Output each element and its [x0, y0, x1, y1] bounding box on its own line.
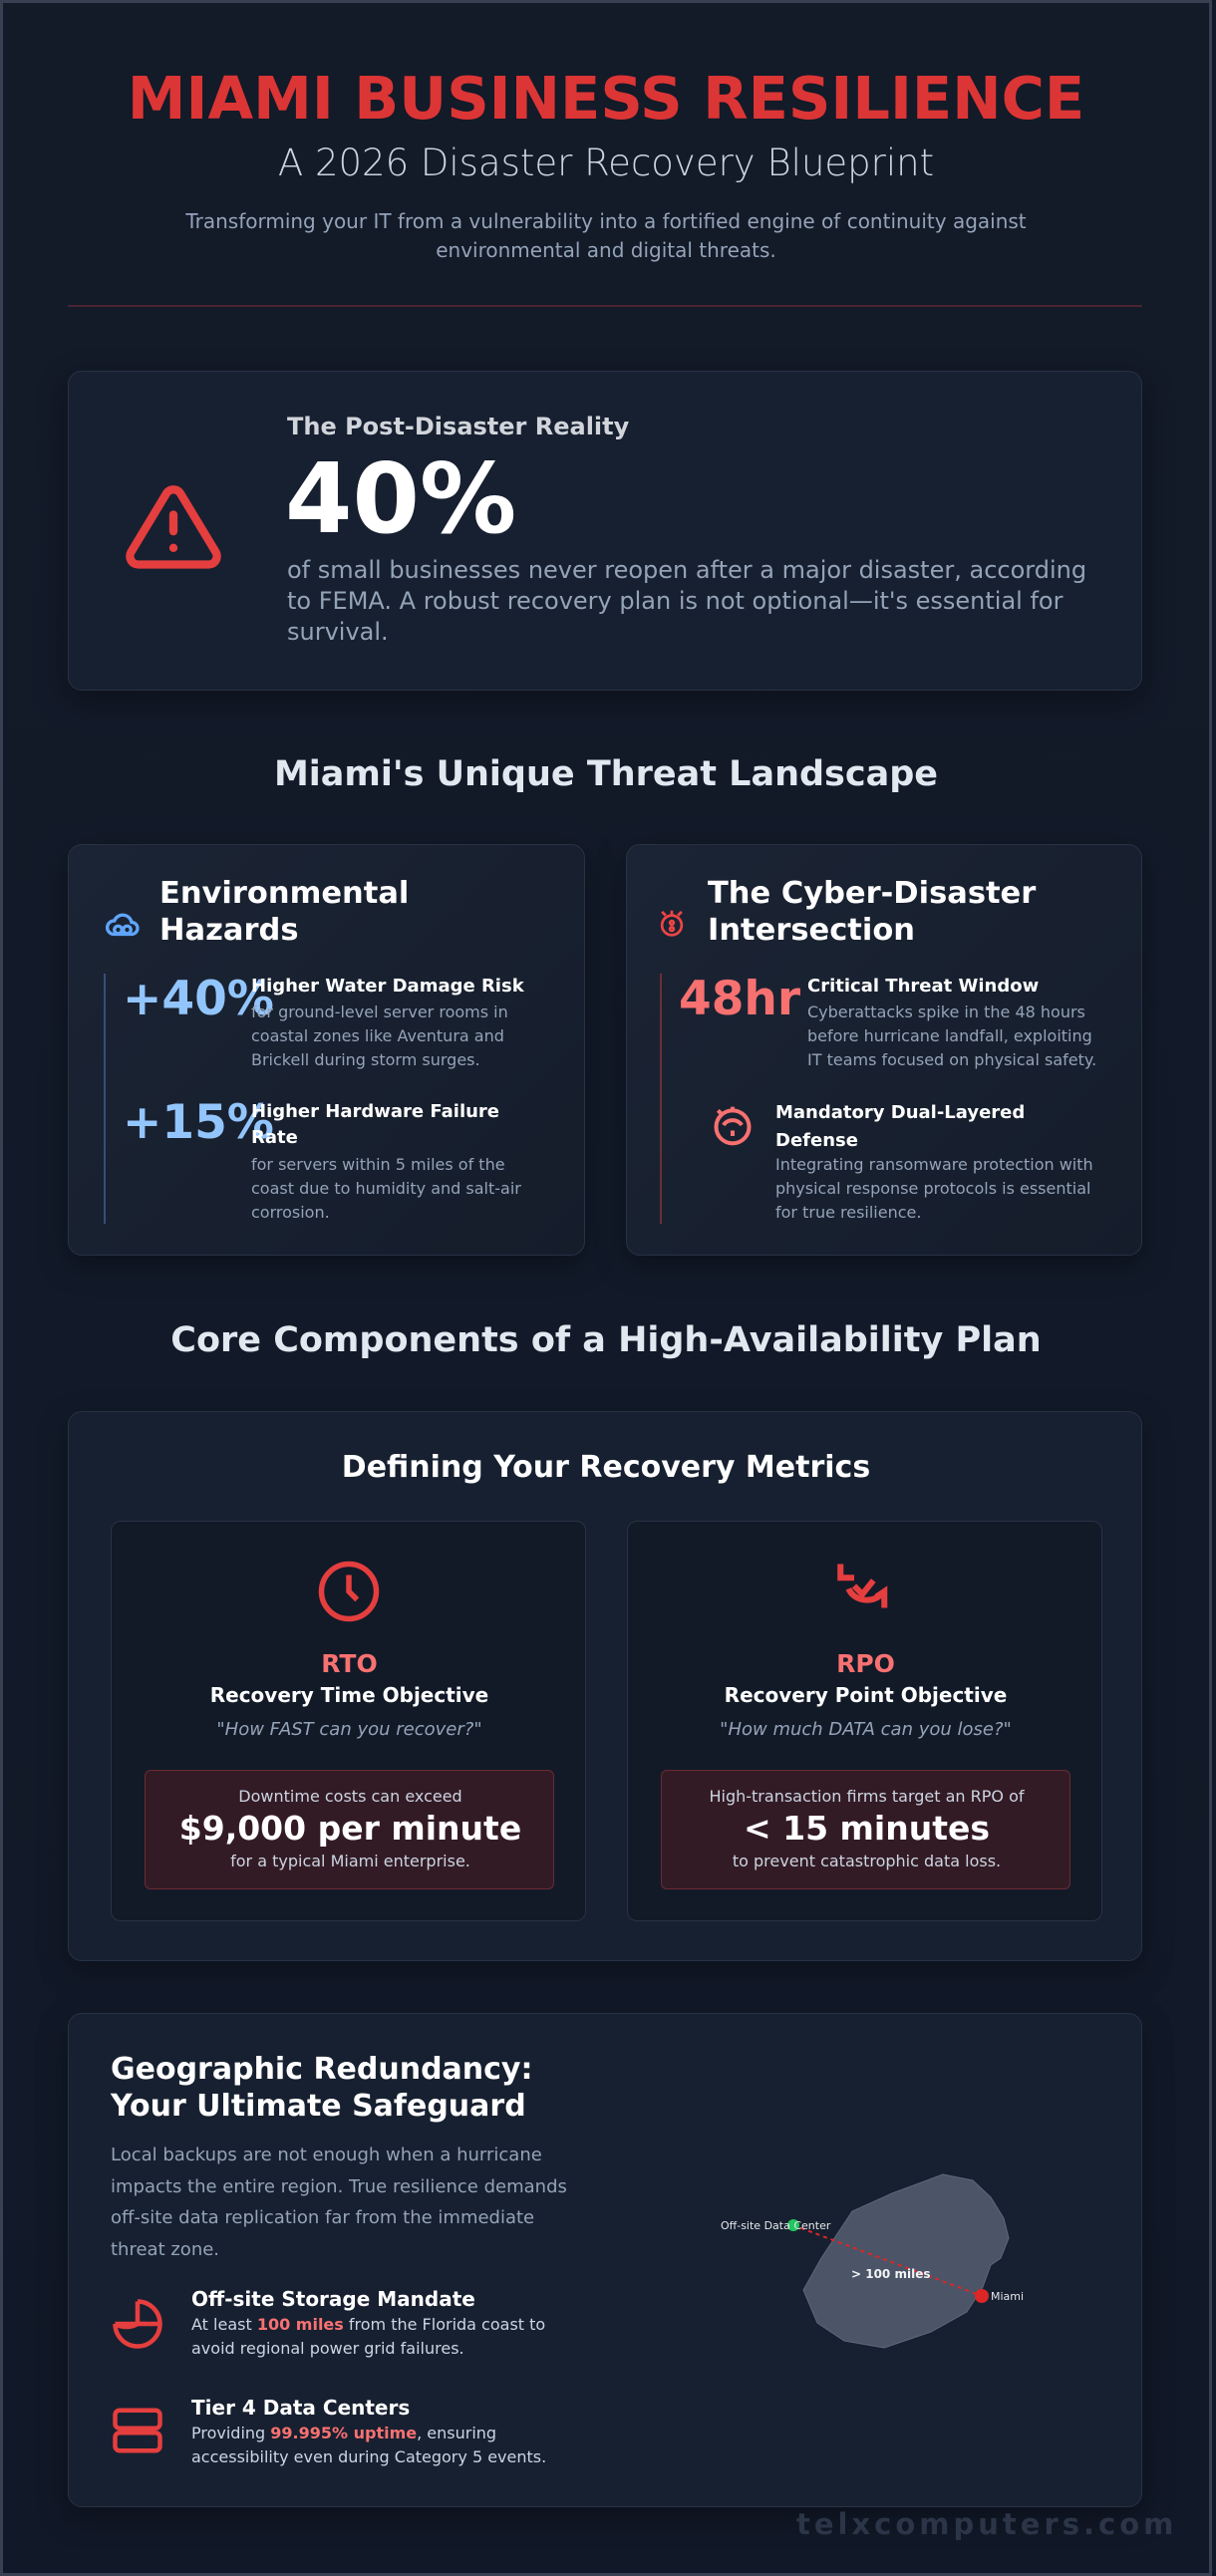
icon: cloud	[106, 913, 140, 937]
tagline: environmental and digital threats.	[436, 238, 776, 262]
tagline: Transforming your IT from a vulnerability into a fortified engine of continuity against	[185, 209, 1027, 233]
callout: downtime cost: $9,000 per minute	[179, 1809, 521, 1848]
panel: post-disaster reality	[68, 371, 1142, 691]
stat: water damage: coastal zones like Aventura and	[251, 1026, 504, 1045]
stat: hardware failure: Rate	[251, 1127, 298, 1148]
description: of small businesses never reopen after a major disaster, according	[287, 556, 1086, 584]
callout: downtime cost: Downtime costs can exceed	[238, 1787, 462, 1806]
card: RTO: Recovery Time Objective	[210, 1683, 488, 1707]
heading: The Post-Disaster Reality	[287, 413, 629, 440]
callout: downtime cost: for a typical Miami enterprise.	[230, 1852, 470, 1870]
paragraph	[111, 2145, 567, 2260]
item: off-site storage: Off-site Storage Mandate	[191, 2287, 475, 2311]
panel: cyber-disaster intersection	[626, 844, 1142, 1256]
callout: downtime cost	[145, 1770, 554, 1889]
callout: RPO target: < 15 minutes	[744, 1809, 990, 1848]
stat: 48hr: 48hr	[679, 972, 800, 1026]
paragraph: impacts the entire region. True resilience demands	[111, 2176, 567, 2196]
stat: 48hr: Cyberattacks spike in the 48 hours	[807, 1002, 1085, 1021]
description	[287, 556, 1086, 646]
heading: Defining Your Recovery Metrics	[342, 1450, 870, 1485]
card: RTO	[111, 1521, 586, 1921]
item: tier 4 data centers	[113, 2396, 546, 2466]
paragraph: off-site data replication far from the immediate	[111, 2207, 534, 2228]
icon: pie	[113, 2299, 162, 2349]
icon: server	[113, 2408, 162, 2453]
heading: Environmental	[159, 876, 409, 911]
item: off-site storage: avoid regional power grid failures.	[191, 2339, 464, 2358]
stat: hardware failure: coast due to humidity and salt-air	[251, 1179, 521, 1198]
heading: The Cyber-Disaster	[708, 876, 1036, 911]
item: dual-layered defense: Defense	[775, 1130, 858, 1151]
heading: Geographic Redundancy:	[111, 2052, 532, 2087]
stat: 48hr: IT teams focused on physical safety.	[807, 1050, 1096, 1069]
paragraph: Local backups are not enough when a hurricane	[111, 2145, 542, 2165]
title: MIAMI BUSINESS RESILIENCE	[128, 64, 1084, 133]
map: florida distance: Off-site Data Center	[721, 2219, 831, 2232]
item: dual-layered defense: Mandatory Dual-Layered	[775, 1102, 1025, 1123]
heading: Your Ultimate Safeguard	[111, 2089, 526, 2124]
card: RTO: "How FAST can you recover?"	[216, 1719, 482, 1740]
map: florida distance: > 100 miles	[851, 2267, 930, 2281]
item: dual-layered defense: Integrating ransomware protection with	[775, 1155, 1093, 1174]
panel: geographic redundancy	[68, 2013, 1142, 2507]
card: RPO: RPO	[836, 1649, 895, 1678]
heading: Hazards	[159, 913, 298, 948]
description: survival.	[287, 618, 389, 646]
card: RPO	[627, 1521, 1102, 1921]
map: florida distance	[721, 2174, 1024, 2348]
description: to FEMA. A robust recovery plan is not optional—it's essential for	[287, 587, 1063, 615]
card: RTO: RTO	[321, 1649, 378, 1678]
stat: 48hr: before hurricane landfall, exploiting	[807, 1026, 1092, 1045]
map: florida distance: Miami	[991, 2290, 1024, 2303]
callout: RPO target: to prevent catastrophic data loss.	[733, 1852, 1001, 1870]
stat: water damage: for ground-level server rooms in	[251, 1002, 508, 1021]
card: RPO: Recovery Point Objective	[725, 1683, 1007, 1707]
stat: hardware failure: Higher Hardware Failure	[251, 1101, 499, 1122]
subtitle: A 2026 Disaster Recovery Blueprint	[278, 142, 934, 184]
card: RPO: "How much DATA can you lose?"	[720, 1719, 1012, 1740]
stat: hardware failure: for servers within 5 miles of the	[251, 1155, 505, 1174]
heading	[110, 2052, 532, 2124]
icon: gauge	[714, 1106, 752, 1146]
icon: clock	[319, 1561, 379, 1622]
item: dual-layered defense	[714, 1102, 1093, 1222]
stat: water damage	[123, 972, 524, 1069]
icon: restore	[837, 1565, 887, 1608]
item: tier 4 data centers: Tier 4 Data Centers	[191, 2396, 410, 2420]
stat: hardware failure: +15%	[123, 1095, 274, 1150]
stat: hardware failure	[123, 1095, 521, 1222]
heading: threat landscape: Miami's Unique Threat Landscape	[274, 754, 938, 794]
item: tier 4 data centers: Providing 99.995% uptime, ensuring	[191, 2424, 496, 2442]
item: tier 4 data centers: accessibility even during Category 5 events.	[191, 2447, 546, 2466]
item: dual-layered defense: for true resilience.	[775, 1203, 921, 1222]
panel: recovery metrics	[68, 1411, 1142, 1961]
stat: water damage: Higher Water Damage Risk	[251, 976, 524, 997]
stat: water damage: +40%	[123, 972, 274, 1026]
paragraph: threat zone.	[111, 2238, 219, 2260]
heading	[159, 876, 409, 948]
stat: hardware failure: corrosion.	[251, 1203, 330, 1222]
icon: warning triangle	[126, 485, 221, 569]
heading: core components: Core Components of a High-Availability Plan	[170, 1320, 1042, 1360]
item: off-site storage: At least 100 miles from the Florida coast to	[191, 2315, 545, 2334]
callout: RPO target	[661, 1770, 1070, 1889]
tagline	[185, 209, 1027, 262]
panel: environmental hazards	[68, 844, 585, 1256]
stat: 48hr: Critical Threat Window	[807, 976, 1039, 997]
item: dual-layered defense: physical response protocols is essential	[775, 1179, 1090, 1198]
watermark: telxcomputers.com	[796, 2507, 1177, 2541]
stat: water damage: Brickell during storm surges.	[251, 1050, 480, 1069]
icon: bug timer	[660, 911, 684, 937]
heading: Intersection	[708, 913, 915, 948]
callout: RPO target: High-transaction firms target an RPO of	[709, 1787, 1025, 1806]
item: off-site storage	[113, 2287, 545, 2358]
heading	[708, 876, 1037, 948]
stat 40%: 40%	[285, 442, 516, 555]
stat: 48hr	[679, 972, 1096, 1069]
